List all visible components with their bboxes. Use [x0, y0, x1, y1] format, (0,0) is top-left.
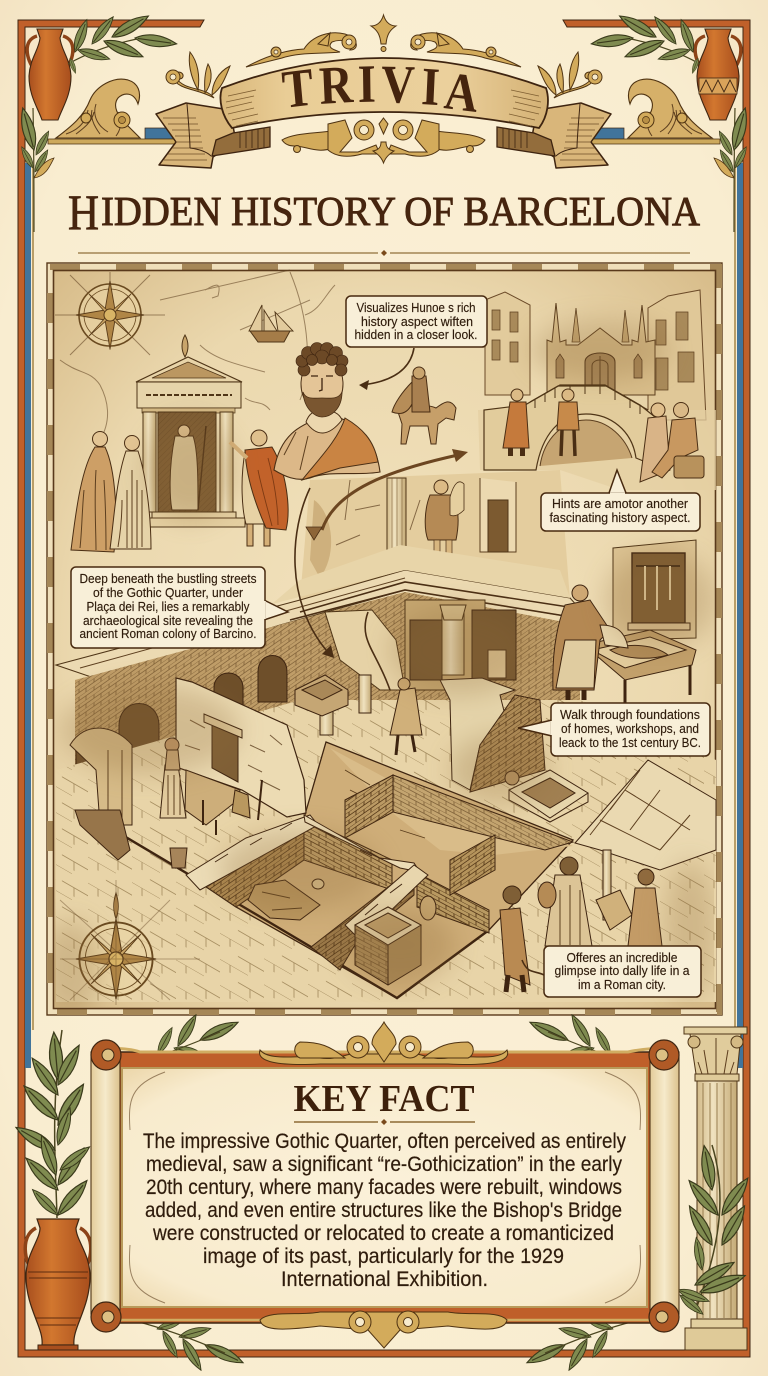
callout: deep beneath: archaeological site revealing the	[83, 613, 253, 628]
callout: deep beneath: Deep beneath the bustling streets	[80, 571, 257, 586]
stone bridge	[484, 385, 665, 470]
background wall behind terrace	[300, 470, 570, 600]
icon: temple	[136, 335, 245, 527]
key fact body: International Exhibition.	[281, 1267, 488, 1291]
callout: visualizes: history aspect wiften	[361, 314, 473, 329]
callout: walk through	[518, 703, 710, 756]
laurel top right	[591, 11, 700, 74]
paving texture	[56, 700, 716, 1002]
callout: deep beneath	[71, 567, 288, 648]
low arch left	[70, 728, 132, 860]
figure on bridge, tunic	[557, 389, 579, 456]
Corinthian column	[684, 1027, 747, 1350]
callout: offeres	[522, 946, 701, 997]
callout: offeres: im a Roman city.	[578, 977, 666, 992]
stone basin	[505, 770, 588, 822]
laurel side right	[714, 106, 751, 232]
figure on bridge, orange robe	[503, 389, 529, 456]
thin curved arrow down	[295, 488, 334, 658]
callout: visualizes: hidden in a closer look.	[354, 327, 478, 342]
icon: compass rose top	[76, 281, 144, 349]
terrace above the excavation	[56, 545, 590, 680]
icon: compass rose lower	[76, 893, 156, 999]
heading divider	[294, 1119, 475, 1125]
Gothic city buildings	[485, 290, 706, 420]
arches in back wall	[76, 656, 287, 790]
ornament above banner	[246, 15, 521, 67]
banner ribbon	[156, 53, 611, 168]
gold sprig right	[538, 52, 602, 98]
callout: hints: fascinating history aspect.	[550, 510, 690, 525]
man with tunic, centre	[390, 678, 422, 755]
gold ornament bottom	[260, 1311, 507, 1348]
ornament below banner	[282, 118, 485, 163]
map lines	[55, 270, 710, 985]
sepia shading over the scene	[40, 320, 716, 1020]
callout: hints: Hints are amotor another	[552, 496, 689, 511]
scroll frame	[91, 1040, 679, 1332]
gold sprig left	[166, 52, 230, 98]
seated couple	[640, 402, 704, 482]
stone slab right	[575, 760, 716, 930]
laurel side left	[17, 106, 54, 232]
stone fountain box	[355, 896, 436, 985]
key fact body	[143, 1129, 626, 1291]
bucket	[170, 848, 187, 868]
pit walls	[186, 775, 573, 970]
two Roman women	[71, 432, 151, 552]
callout: walk through: of homes, workshops, and	[561, 721, 699, 736]
central stone room with doorways	[405, 600, 516, 690]
low wall with door	[176, 678, 306, 817]
key fact body: added, and even entire structures like the Bishop's Bridge	[145, 1198, 622, 1222]
workshop window	[613, 540, 696, 640]
panel: key fact	[91, 1022, 679, 1348]
broken wall near callout	[325, 610, 405, 690]
title divider	[78, 250, 690, 256]
walkway ground floor	[56, 700, 716, 1002]
group of three figures bottom right	[500, 857, 662, 992]
broken columns and trough	[295, 675, 371, 735]
callout: visualizes	[346, 296, 487, 347]
key fact body: medieval, saw a significant “re-Gothicization” in the early	[146, 1152, 622, 1176]
icon: sailing ship	[249, 305, 293, 342]
horse and rider	[392, 367, 456, 444]
callout: deep beneath: ancient Roman colony of Barcino.	[80, 626, 256, 641]
laurels around key fact panel	[130, 1012, 638, 1373]
rubble in pit	[248, 879, 324, 920]
laurel bottom left	[13, 1030, 93, 1219]
panel border	[47, 263, 722, 1015]
acanthus left	[56, 79, 140, 138]
key fact heading: KEY FACT	[294, 1078, 474, 1120]
callout: deep beneath: Plaça dei Rei, lies a remarkably	[86, 599, 250, 614]
lines radiating from lower compass	[60, 880, 200, 1005]
callout arrow to bust	[359, 348, 414, 390]
canal and pavement	[478, 410, 716, 490]
callout: hints	[541, 470, 700, 531]
callout: offeres: glimpse into dally life in a	[554, 963, 690, 978]
column on terrace	[380, 478, 412, 566]
key fact body: 20th century, where many facades were rebuilt, windows	[146, 1175, 622, 1199]
callout: offeres: Offeres an incredible	[566, 950, 678, 965]
main title: H	[68, 184, 99, 240]
key fact body: image of its past, particularly for the 1929	[203, 1244, 564, 1268]
big curved arrow to bridge	[306, 449, 468, 540]
excavation pit floor	[196, 742, 573, 998]
pit edge	[97, 820, 489, 998]
laurel top left	[68, 11, 177, 74]
figure with scroll	[425, 480, 464, 562]
bust of Roman	[274, 342, 380, 480]
acanthus right	[628, 79, 712, 138]
main title: IDDEN HISTORY OF BARCELONA	[101, 188, 700, 234]
gold ornament top	[260, 1022, 508, 1064]
man in red toga	[230, 430, 288, 546]
butcher figure and table	[553, 585, 696, 705]
woman at table	[160, 738, 262, 835]
callout: deep beneath: of the Gothic Quarter, under	[93, 585, 244, 600]
corner flourishes	[129, 1072, 641, 1303]
icon: amphora top right	[695, 29, 741, 120]
key fact body: were constructed or relocated to create a romanticized	[152, 1221, 614, 1245]
callout: visualizes: Visualizes Hunoe s rich	[356, 300, 476, 315]
stone stepped wall right	[440, 678, 545, 792]
laurel bottom right	[676, 1145, 753, 1317]
banner title: TRIVIA	[280, 53, 481, 124]
callout: walk through: leack to the 1st century BC.	[559, 735, 701, 750]
callout: walk through: Walk through foundations	[560, 707, 700, 722]
back wall of excavation	[75, 592, 580, 790]
icon: amphora top left	[27, 29, 73, 120]
panel: illustrated map	[40, 263, 722, 1020]
parchment card	[122, 1068, 647, 1307]
icon: amphora bottom left	[25, 1219, 91, 1350]
key fact body: The impressive Gothic Quarter, often perceived as entirely	[143, 1129, 626, 1153]
